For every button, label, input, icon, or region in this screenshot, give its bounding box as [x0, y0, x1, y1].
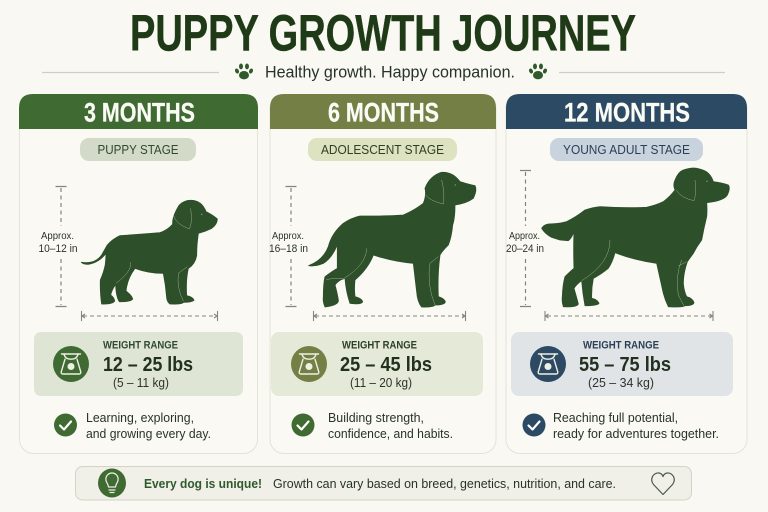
height marker — [286, 186, 296, 306]
weight panel: 3 months — [34, 332, 243, 396]
width marker — [545, 311, 713, 321]
weight panel: 3 months: (5 – 11 kg) — [113, 376, 169, 390]
footer callout — [76, 466, 692, 500]
weight panel: 6 months — [271, 332, 483, 396]
check note: 3 months — [54, 410, 211, 441]
width marker — [314, 311, 466, 321]
dog silhouette: 6 months — [309, 172, 476, 307]
height label — [38, 231, 78, 255]
check note: 6 months — [292, 410, 453, 441]
weight panel: 12 months: 55 – 75 lbs — [579, 354, 671, 376]
footer callout: Every dog is unique! — [144, 476, 262, 491]
height marker — [56, 186, 66, 306]
header: 3 months: 3 MONTHS — [84, 98, 195, 128]
weight panel: 6 months: (11 – 20 kg) — [350, 376, 412, 390]
check note: 12 months — [522, 410, 719, 441]
height label: 20–24 in — [506, 243, 544, 255]
header: 6 months: 6 MONTHS — [328, 98, 439, 128]
height label: Approx. — [41, 231, 74, 242]
weight panel: 3 months: 12 – 25 lbs — [103, 354, 193, 376]
panel: 3 months — [19, 94, 258, 454]
check note: 3 months: and growing every day. — [86, 426, 211, 441]
weight panel: 12 months: WEIGHT RANGE — [583, 340, 659, 352]
footer callout: Growth can vary based on breed, genetics, nutrition, and care. — [273, 476, 616, 491]
weight panel: 6 months: 25 – 45 lbs — [340, 354, 432, 376]
weight panel: 12 months: (25 – 34 kg) — [588, 376, 654, 390]
icon: right paw — [528, 64, 548, 79]
icon: scale — [530, 346, 566, 382]
width marker — [82, 311, 218, 321]
header: 12 months — [506, 94, 747, 129]
header: 6 months — [270, 94, 496, 129]
stage pill: adolescent — [308, 138, 457, 161]
dog silhouette: 12 months — [542, 168, 729, 307]
height label: Approx. — [272, 231, 304, 242]
subtitle text: Healthy growth. Happy companion. — [265, 64, 515, 82]
panel: 12 months — [506, 94, 747, 454]
subtitle row — [42, 64, 725, 82]
check note: 3 months: Learning, exploring, — [86, 410, 194, 425]
stage pill: puppy — [80, 138, 196, 161]
check note: 6 months: Building strength, — [328, 410, 424, 425]
panel: 6 months — [269, 94, 496, 454]
header: 3 months — [19, 94, 258, 129]
check note: 12 months: Reaching full potential, — [553, 410, 678, 425]
height label: 10–12 in — [38, 243, 78, 255]
icon: left paw — [234, 64, 254, 79]
dog silhouette: 3 months — [81, 200, 217, 304]
weight panel: 3 months: WEIGHT RANGE — [103, 340, 178, 352]
check note: 6 months: confidence, and habits. — [328, 426, 453, 441]
height label: 16–18 in — [269, 243, 308, 255]
check note: 12 months: ready for adventures together. — [553, 426, 719, 441]
icon: scale — [53, 346, 89, 382]
weight panel: 12 months — [511, 332, 733, 396]
stage pill: puppy: PUPPY STAGE — [98, 142, 179, 157]
height label — [506, 231, 544, 255]
height marker — [520, 170, 531, 306]
height label: Approx. — [509, 231, 540, 242]
icon: scale — [291, 346, 327, 382]
icon: light bulb — [98, 468, 126, 498]
stage pill: young adult: YOUNG ADULT STAGE — [563, 142, 690, 157]
stage pill: adolescent: ADOLESCENT STAGE — [321, 142, 444, 157]
stage pill: young adult — [550, 138, 703, 161]
icon: heart — [652, 473, 674, 494]
height label — [269, 231, 308, 255]
header: 12 months: 12 MONTHS — [564, 98, 690, 128]
weight panel: 6 months: WEIGHT RANGE — [342, 340, 417, 352]
